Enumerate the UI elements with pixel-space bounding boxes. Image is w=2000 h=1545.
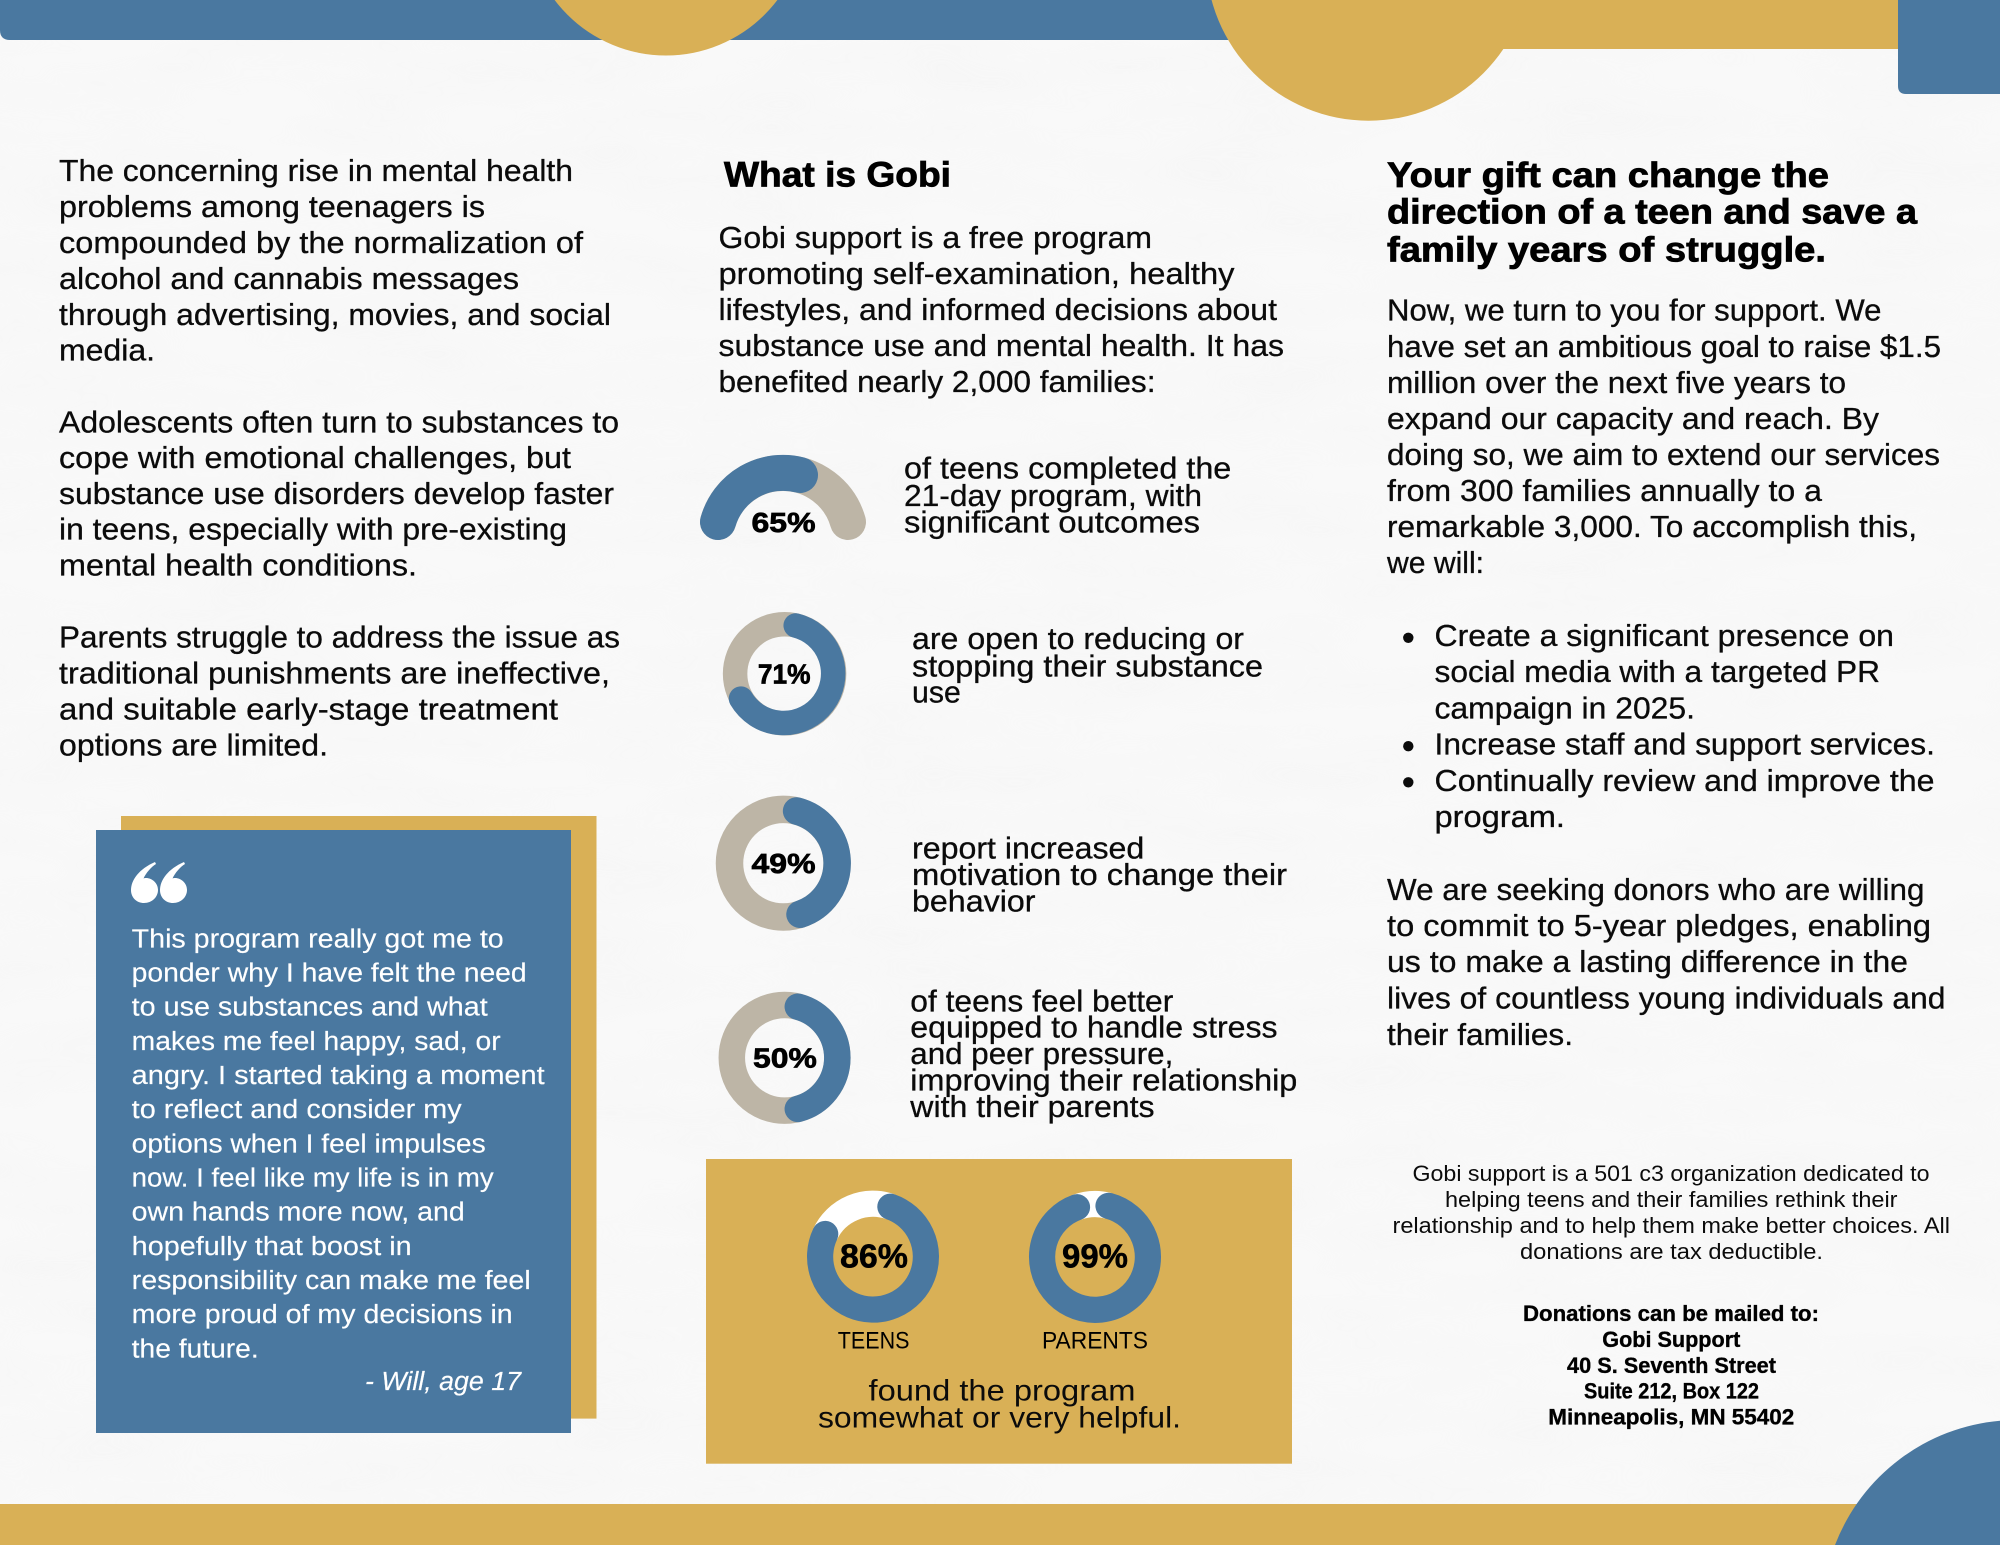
left column intro text: compounded by the normalization of [59, 226, 584, 260]
panel caption: found the program [868, 1375, 1136, 1408]
quote text: own hands more now, and [132, 1199, 465, 1227]
quote text: now. I feel like my life is in my [132, 1164, 494, 1192]
organization description: helping teens and their families rethink their [1445, 1187, 1898, 1212]
heading: your gift: direction of a teen and save a [1387, 193, 1918, 232]
quote text: the future. [132, 1335, 259, 1363]
left column intro text: media. [59, 334, 155, 368]
right column appeal text: remarkable 3,000. To accomplish this, [1387, 510, 1917, 544]
stat: 50 percent: 50% [753, 1042, 817, 1073]
panel: program helpfulness [706, 1159, 1292, 1464]
quote text: angry. I started taking a moment [132, 1062, 545, 1090]
donor pledge text: us to make a lasting difference in the [1387, 945, 1908, 979]
stat text: significant outcomes [904, 506, 1200, 540]
left column intro text: in teens, especially with pre-existing [59, 512, 567, 546]
left column intro text: substance use disorders develop faster [59, 477, 614, 511]
stat: 71 percent: 71% [758, 658, 811, 689]
left column intro text: The concerning rise in mental health [59, 154, 573, 188]
icon: quotation mark [131, 862, 187, 903]
stat text: and peer pressure, [910, 1037, 1173, 1071]
left column intro text: options are limited. [59, 728, 328, 762]
right column appeal text: have set an ambitious goal to raise $1.5 [1387, 330, 1941, 364]
quote text: options when I feel impulses [132, 1130, 486, 1158]
right column appeal text: from 300 families annually to a [1387, 474, 1822, 508]
mailing address: Suite 212, Box 122 [1584, 1379, 1759, 1404]
stat text [909, 984, 1297, 1124]
left column intro text [59, 154, 620, 762]
quote text: ponder why I have felt the need [132, 960, 527, 988]
label: teens: TEENS [838, 1327, 909, 1354]
stat text: of teens completed the [904, 452, 1231, 486]
quote text: more proud of my decisions in [132, 1301, 513, 1329]
stat: 49 percent [730, 809, 1287, 918]
heading: your gift: Your gift can change the [1387, 156, 1829, 195]
quote text: responsibility can make me feel [132, 1267, 531, 1295]
left column intro text: Adolescents often turn to substances to [59, 405, 619, 439]
mailing address: Donations can be mailed to: [1523, 1301, 1819, 1326]
left column intro text: mental health conditions. [59, 548, 417, 582]
donut chart: 50% [732, 1005, 837, 1111]
stat text: motivation to change their [912, 858, 1287, 892]
heading: your gift: family years of struggle. [1387, 230, 1826, 270]
right column appeal text: Now, we turn to you for support. We [1387, 294, 1882, 328]
panel: program helpfulness: 86% [840, 1237, 908, 1274]
stat: 50 percent [732, 984, 1297, 1124]
quote text [132, 926, 545, 1363]
bullet list: Create a significant presence on [1434, 619, 1894, 653]
quote text: This program really got me to [132, 926, 504, 954]
donut chart: parents 99% [1042, 1204, 1148, 1310]
stat: 65 percent [718, 452, 1231, 540]
label: parents: PARENTS [1042, 1327, 1148, 1354]
left column intro text: through advertising, movies, and social [59, 298, 611, 332]
bullet list: Increase staff and support services. [1434, 728, 1935, 762]
stat text: behavior [912, 884, 1036, 918]
stat text: use [912, 676, 961, 710]
bullet list: program. [1434, 800, 1565, 834]
middle column intro text: Gobi support is a free program [718, 221, 1152, 255]
donor pledge text [1387, 873, 1946, 1052]
donut chart: 71% [735, 624, 834, 723]
stat text: of teens feel better [910, 984, 1173, 1018]
mailing address: 40 S. Seventh Street [1567, 1353, 1777, 1378]
organization description: relationship and to help them make better choices. All [1392, 1213, 1950, 1238]
panel caption [818, 1375, 1181, 1434]
stat text: improving their relationship [910, 1063, 1297, 1097]
stat text: 21-day program, with [904, 479, 1202, 513]
top banner shapes [0, 0, 2000, 121]
right column appeal text: we will: [1386, 546, 1484, 580]
donor pledge text: lives of countless young individuals and [1387, 982, 1946, 1016]
right column appeal text: expand our capacity and reach. By [1387, 402, 1880, 436]
donut chart: teens 86% [820, 1204, 926, 1310]
donor pledge text: their families. [1387, 1018, 1573, 1052]
stat: 65 percent: 65% [752, 507, 816, 538]
middle column intro text [718, 221, 1284, 399]
gauge chart: 65% [718, 473, 848, 522]
donut chart: 49% [730, 809, 837, 917]
organization description [1392, 1161, 1950, 1264]
bullet list: social media with a targeted PR [1434, 655, 1880, 689]
left column intro text: traditional punishments are ineffective, [59, 657, 610, 691]
stat text: report increased [912, 832, 1144, 866]
bottom banner shapes [0, 1421, 2000, 1545]
left column intro text: Parents struggle to address the issue as [59, 621, 620, 655]
quote text: hopefully that boost in [132, 1233, 412, 1261]
stat text: with their parents [909, 1090, 1155, 1124]
middle column intro text: substance use and mental health. It has [718, 329, 1284, 363]
bullet list: Continually review and improve the [1434, 764, 1934, 798]
middle column intro text: lifestyles, and informed decisions about [718, 293, 1278, 327]
panel caption: somewhat or very helpful. [818, 1401, 1181, 1434]
stat text [904, 452, 1231, 540]
mailing address: Minneapolis, MN 55402 [1548, 1404, 1794, 1429]
right column appeal text: million over the next five years to [1387, 366, 1846, 400]
heading: What is Gobi: What is Gobi [724, 156, 951, 195]
right column appeal text [1386, 294, 1941, 580]
bullet list: campaign in 2025. [1434, 692, 1695, 726]
bullet list [1403, 619, 1935, 834]
left column intro text: cope with emotional challenges, but [59, 441, 572, 475]
panel: testimonial quote [96, 816, 596, 1433]
stat text: equipped to handle stress [910, 1011, 1278, 1045]
donor pledge text: to commit to 5-year pledges, enabling [1387, 909, 1931, 943]
right column appeal text: doing so, we aim to extend our services [1387, 438, 1940, 472]
quote text: to reflect and consider my [132, 1096, 462, 1124]
quote text: to use substances and what [132, 994, 488, 1022]
left column intro text: and suitable early-stage treatment [59, 692, 559, 726]
stat text [912, 832, 1287, 918]
mailing address [1523, 1301, 1819, 1429]
panel: program helpfulness: 99% [1062, 1237, 1128, 1274]
stat text: are open to reducing or [912, 622, 1244, 656]
quote attribution: - Will, age 17 [365, 1368, 522, 1396]
mailing address: Gobi Support [1602, 1327, 1741, 1352]
left column intro text: alcohol and cannabis messages [59, 262, 519, 296]
donor pledge text: We are seeking donors who are willing [1387, 873, 1924, 907]
stat: 49 percent: 49% [752, 848, 816, 879]
stat text [912, 622, 1263, 710]
middle column intro text: promoting self-examination, healthy [718, 257, 1235, 291]
left column intro text: problems among teenagers is [59, 190, 485, 224]
stat: 71 percent [735, 622, 1263, 723]
middle column intro text: benefited nearly 2,000 families: [718, 365, 1156, 399]
quote text: makes me feel happy, sad, or [132, 1028, 501, 1056]
heading: your gift [1387, 156, 1918, 270]
organization description: Gobi support is a 501 c3 organization dedicated to [1412, 1161, 1930, 1186]
stat text: stopping their substance [912, 649, 1263, 683]
organization description: donations are tax deductible. [1520, 1239, 1823, 1264]
